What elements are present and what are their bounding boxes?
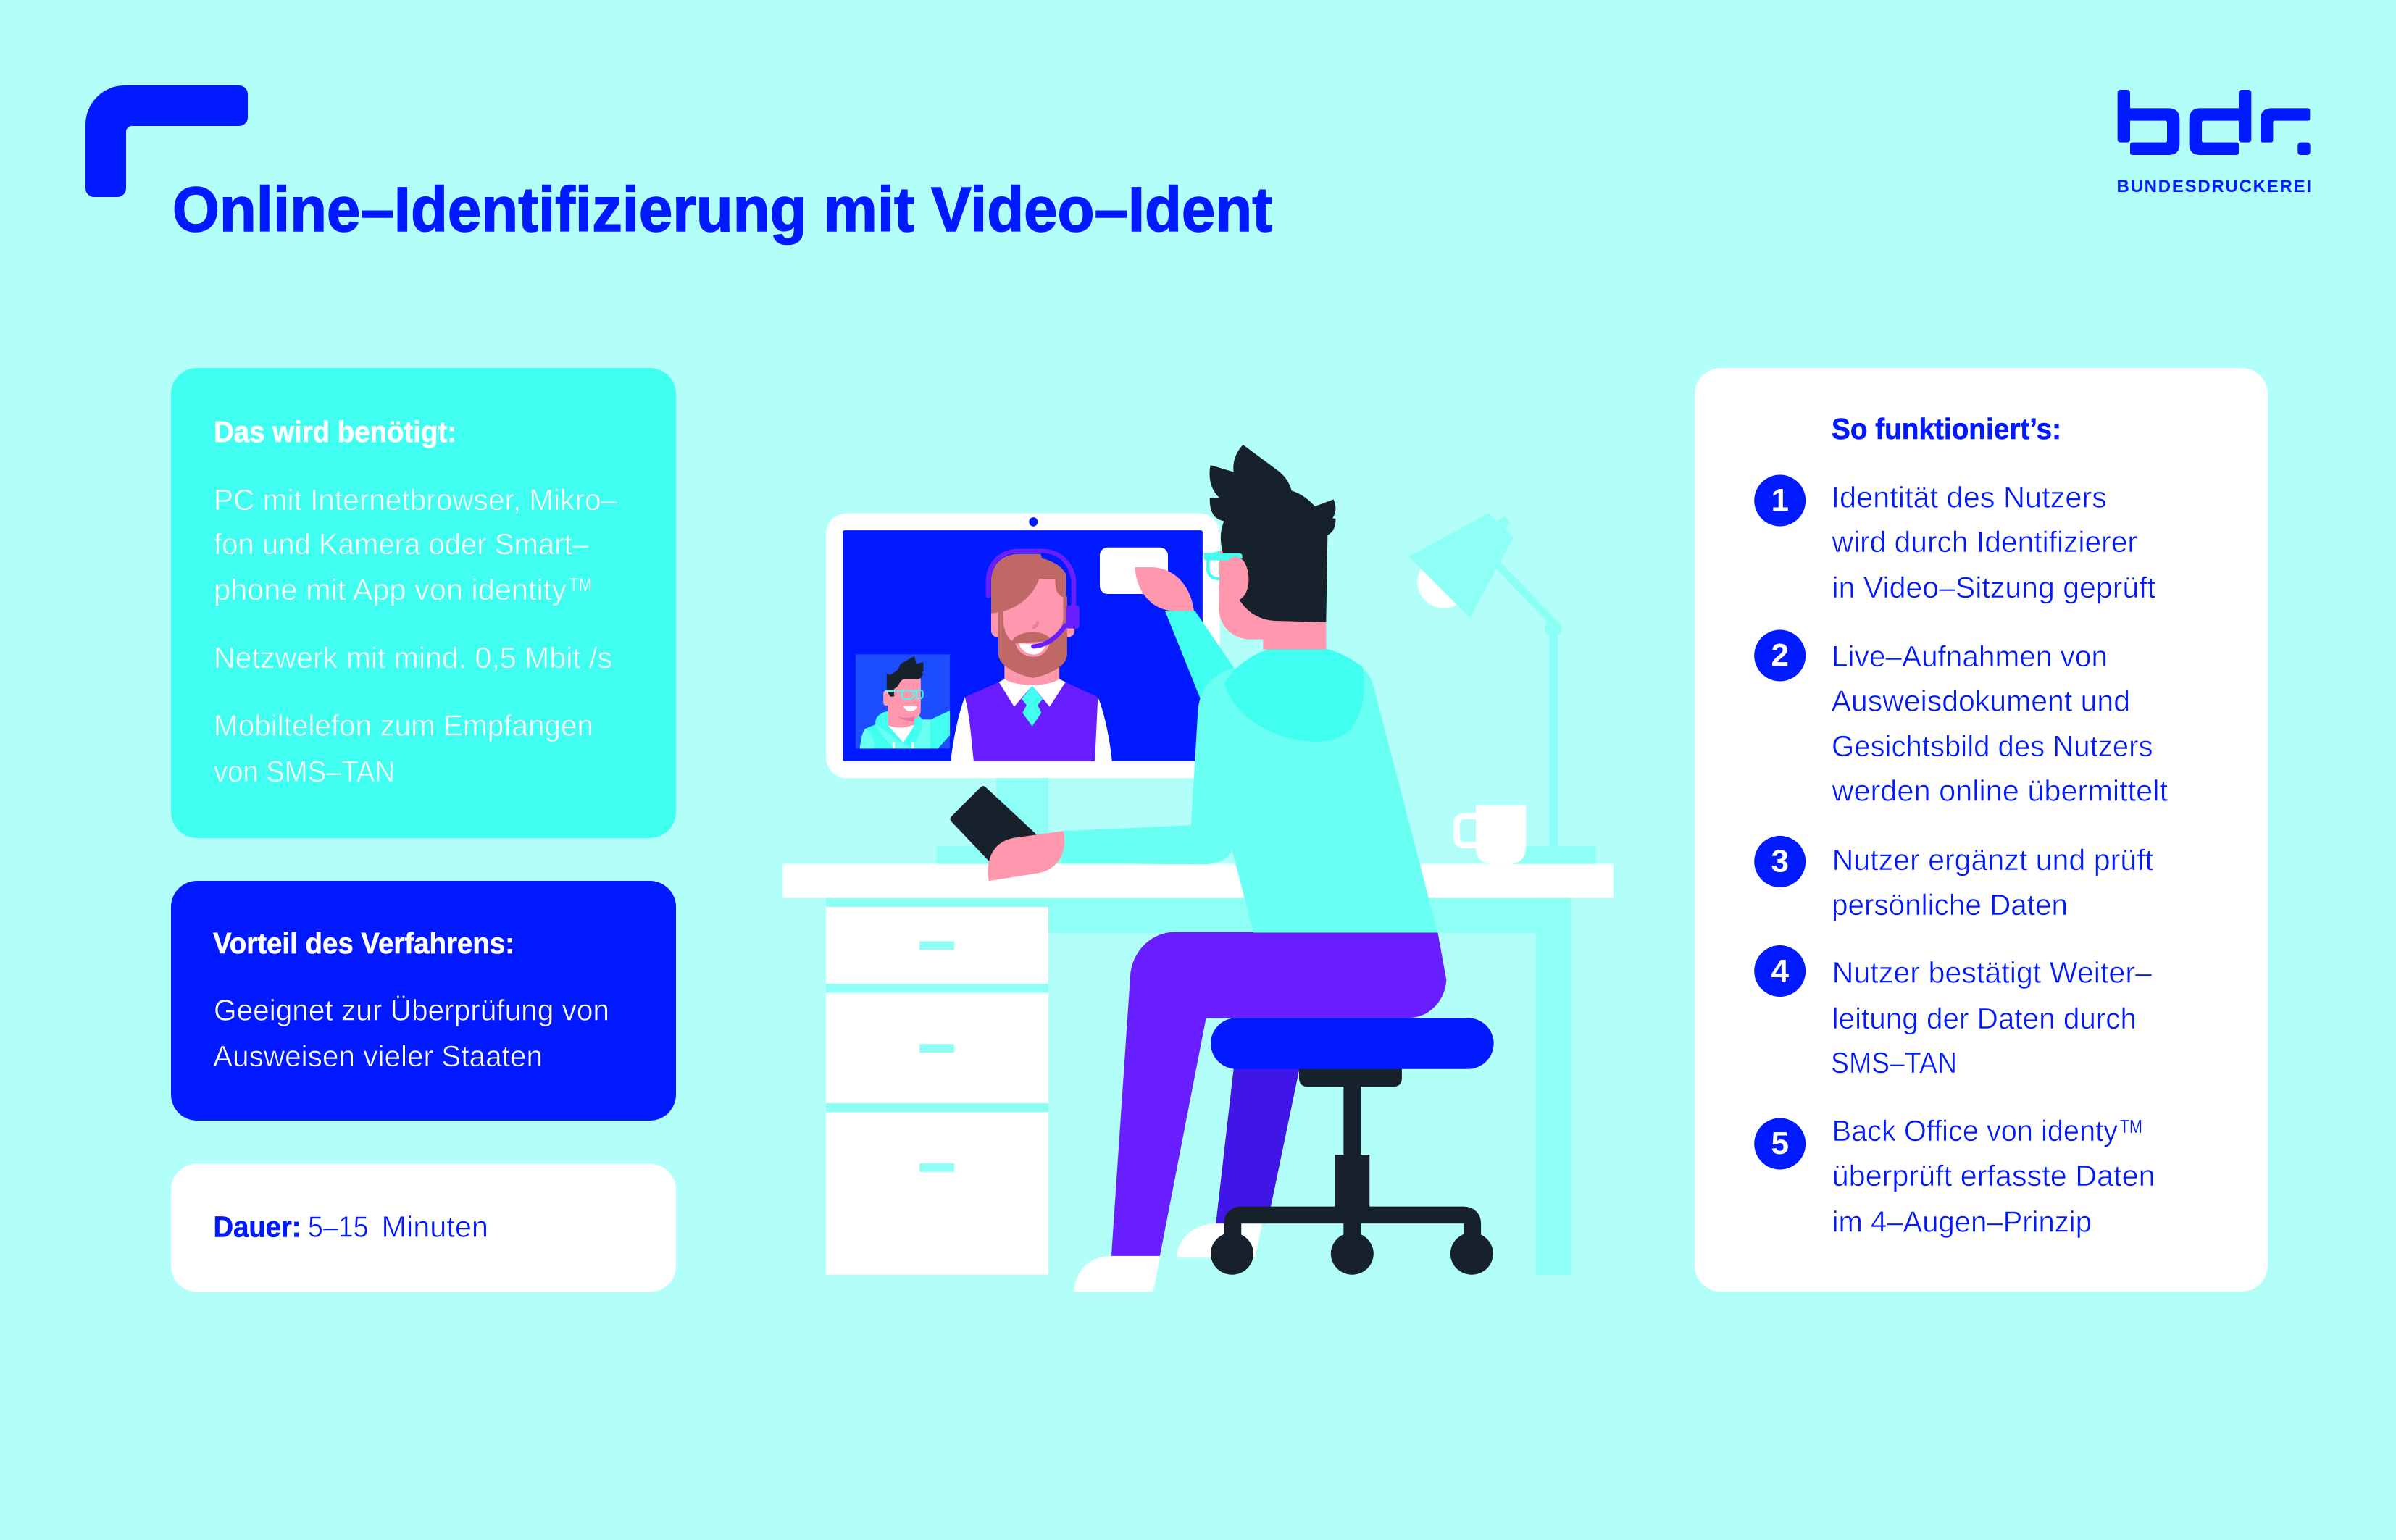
heading: how it works: So funktioniert’s: [1832,412,2061,445]
step 3 [1754,836,2154,921]
step 5: Back Office von identy [1832,1114,2118,1147]
ID card [1100,548,1168,594]
hair [1209,445,1335,622]
hood [1224,645,1364,742]
desk lamp [1408,514,1596,864]
text block: mobile requirement: von SMS–TAN [214,755,395,788]
duration value: Minuten [381,1210,488,1244]
duration label: Dauer: [213,1210,301,1244]
step 2: Gesichtsbild des Nutzers [1832,729,2153,763]
heading: requirements: Das wird benötigt: [214,415,456,448]
monitor screen [843,530,1203,761]
step 3: 3 [1771,843,1789,879]
step 5 [1754,1114,2155,1239]
panel: advantage [171,881,676,1121]
text block: PC requirement: phone mit App von identity [214,573,567,606]
panel: duration [171,1164,676,1292]
shoes [1074,1223,1262,1292]
coffee mug [1457,805,1526,864]
heading: advantage: Vorteil des Verfahrens: [213,926,514,960]
smartphone [953,790,1037,862]
step 2: werden online übermittelt [1831,774,2168,807]
duration value: 5–15 [308,1210,368,1244]
head seen from behind [1204,445,1335,650]
step 2: Live–Aufnahmen von [1832,640,2108,673]
text block: PC requirement: PC mit Internetbrowser, Mikro– [214,483,617,516]
step 1 [1754,475,2156,604]
step 4: leitung der Daten durch [1832,1002,2137,1035]
step 4: SMS–TAN [1831,1046,1957,1079]
step 4 [1754,945,2152,1079]
step 4: Nutzer bestätigt Weiter– [1832,956,2152,989]
step 3: persönliche Daten [1832,888,2068,921]
raised hand [1135,567,1194,611]
step 2 [1754,630,2168,807]
step 2: 2 [1771,637,1789,673]
step 1: 1 [1771,482,1789,518]
text block: mobile requirement: Mobiltelefon zum Empfangen [214,709,593,742]
webcam [1029,517,1038,527]
text block: PC requirement [214,483,617,606]
corner bracket icon [85,85,248,197]
text block: advantage [213,994,609,1073]
stool [1211,1065,1493,1275]
panel: how it works [1695,368,2268,1292]
stool seat [1211,1018,1494,1069]
text block: advantage: Ausweisen vieler Staaten [213,1039,543,1073]
step 5: im 4–Augen–Prinzip [1832,1205,2092,1239]
torso and forearm [1061,667,1437,933]
title: Online–Identifizierung mit Video–Ident [172,175,1272,245]
rear leg [1216,1062,1301,1223]
glasses [1204,551,1243,579]
agent with headset [951,551,1112,761]
desk legs and back [826,898,1571,1275]
neck and ear [1219,551,1326,650]
logo: bdr Bundesdruckerei: BUNDESDRUCKEREI [2117,177,2311,196]
hand on phone [988,831,1064,881]
raised arm [1165,611,1235,704]
step 3: Nutzer ergänzt und prüft [1832,843,2154,876]
step 1: wird durch Identifizierer [1832,525,2137,558]
monitor stand [937,775,1122,864]
step 5: 5 [1771,1126,1789,1161]
person and stool [953,548,1494,1292]
duration value [308,1210,488,1244]
logo: bdr Bundesdruckerei [2117,90,2311,196]
step 5: TM [2120,1116,2142,1137]
step 2: Ausweisdokument und [1832,684,2130,717]
monitor frame [826,514,1220,778]
text block: advantage: Geeignet zur Überprüfung von [214,994,609,1027]
front leg and hips [1111,932,1446,1256]
step 1: in Video–Sitzung geprüft [1832,571,2156,604]
text block: PC requirement: TM [569,575,592,595]
panel: requirements [171,368,676,838]
desk, lamp, mug and monitor scene [782,514,1614,1275]
text block: mobile requirement [214,709,593,788]
step 1: Identität des Nutzers [1832,481,2107,514]
text block: PC requirement: fon und Kamera oder Smart– [214,527,588,561]
drawers [826,898,1048,1275]
step 5: überprüft erfasste Daten [1832,1159,2155,1192]
desk top [782,864,1614,898]
illustration: person at desk in video call [782,445,1614,1292]
text block: network requirement: Netzwerk mit mind. 0,5 Mbit /s [214,641,612,674]
self view window [856,654,950,748]
step 4: 4 [1771,953,1789,989]
video call on screen [856,551,1112,761]
